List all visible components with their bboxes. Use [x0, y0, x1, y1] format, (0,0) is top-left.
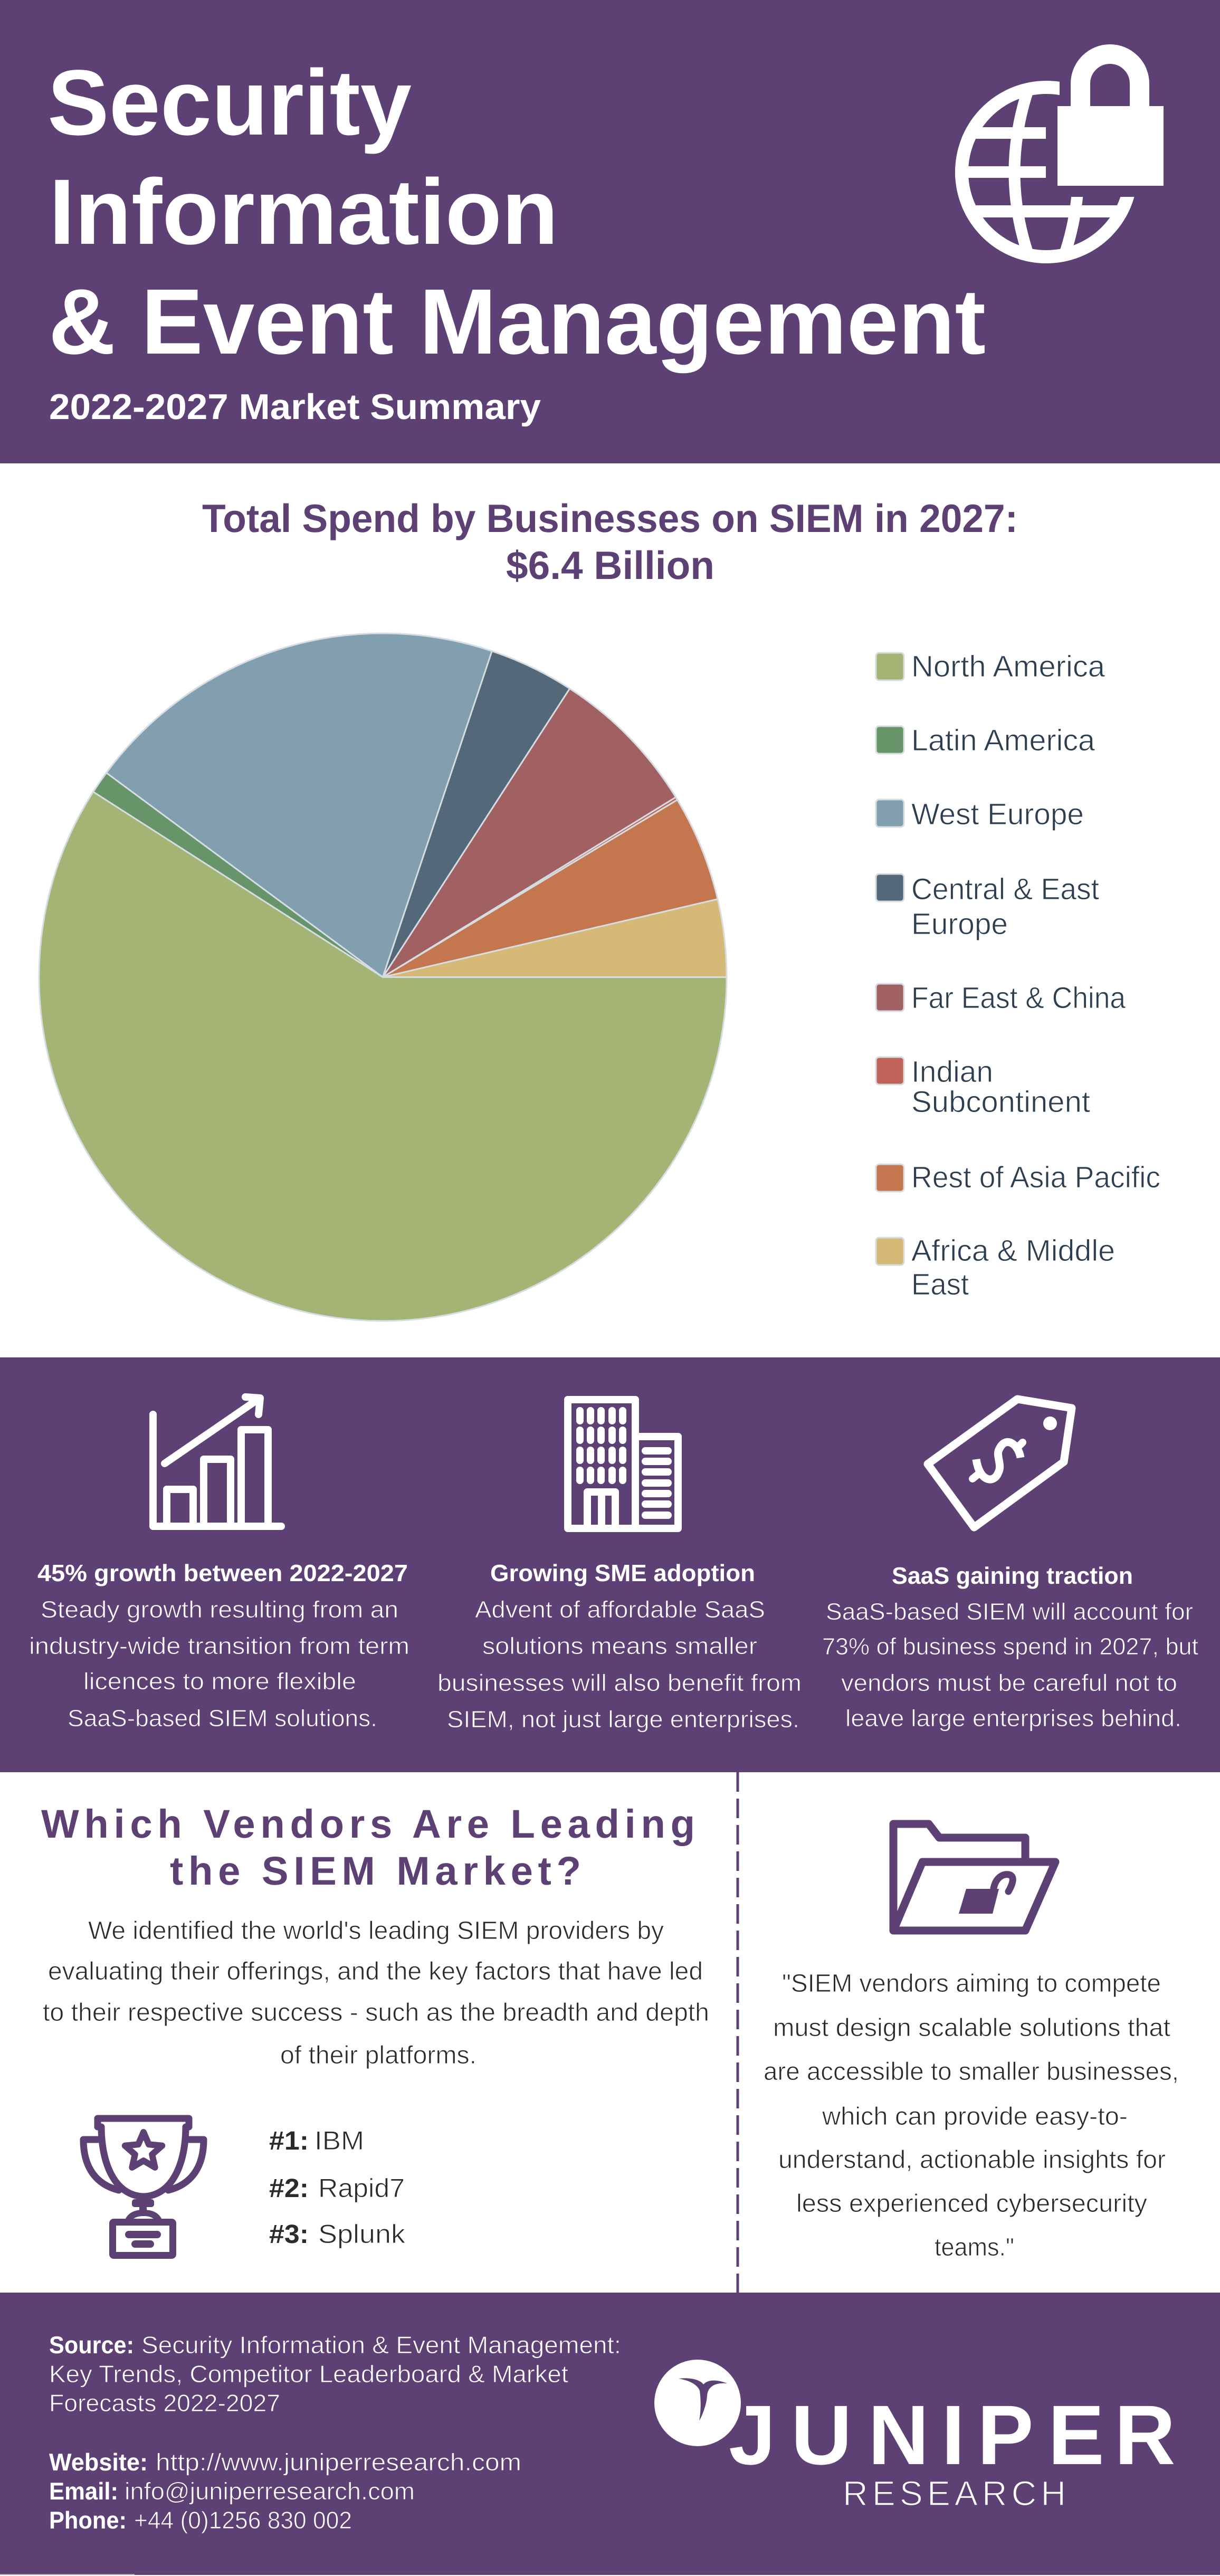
contact details — [49, 2448, 521, 2534]
source text — [49, 2331, 621, 2417]
takeaway: growth: industry-wide transition from term — [29, 1632, 409, 1659]
contact details: http://www.juniperresearch.com — [156, 2448, 521, 2476]
icon: growth bar chart — [153, 1397, 281, 1526]
icon: trophy — [83, 2118, 204, 2256]
title: Security — [47, 51, 412, 155]
takeaway: SaaS traction: SaaS-based SIEM will account for — [826, 1598, 1193, 1625]
takeaway: SME adoption: Advent of affordable SaaS — [475, 1596, 765, 1623]
contact details: Phone: — [49, 2506, 127, 2534]
logo: Juniper Research: JUNIPER — [729, 2388, 1176, 2482]
legend — [876, 650, 1160, 1301]
source text: Key Trends, Competitor Leaderboard & Market — [49, 2360, 568, 2388]
description: We identified the world's leading SIEM providers by — [88, 1917, 664, 1945]
ranking list — [269, 2126, 406, 2249]
legend: Far East & China — [911, 981, 1126, 1015]
heading: the SIEM Market? — [170, 1849, 581, 1894]
panel: footer — [0, 2293, 1220, 2575]
takeaway: SaaS traction: 73% of business spend in 2027, but — [822, 1633, 1198, 1660]
source text: Security Information & Event Management: — [141, 2331, 621, 2359]
source text: Source: — [49, 2331, 134, 2359]
ranking list: Splunk — [318, 2219, 406, 2249]
takeaway: SME adoption: solutions means smaller — [482, 1632, 757, 1659]
ranking list: Rapid7 — [318, 2173, 405, 2203]
chart title: Total Spend by Businesses on SIEM in 2027: — [202, 496, 1018, 540]
quote text: "SIEM vendors aiming to compete — [782, 1970, 1161, 1998]
heading: Which Vendors Are Leading — [41, 1802, 695, 1847]
title — [47, 51, 986, 374]
description — [43, 1917, 709, 2069]
description: to their respective success - such as the breadth and depth — [43, 1999, 709, 2027]
panel: header — [0, 0, 1220, 463]
contact details: +44 (0)1256 830 002 — [134, 2506, 352, 2534]
panel: key takeaways — [0, 1357, 1220, 1772]
takeaway: growth: licences to more flexible — [83, 1668, 356, 1695]
title: Information — [49, 160, 558, 264]
icon: office buildings — [568, 1400, 678, 1528]
takeaway: growth: Steady growth resulting from an — [41, 1596, 398, 1623]
panel: analyst quote — [764, 1824, 1179, 2261]
ranking list: #3: — [269, 2219, 309, 2249]
ranking list: IBM — [314, 2126, 364, 2155]
logo: Juniper Research — [654, 2360, 1176, 2513]
takeaway: SaaS traction: leave large enterprises behind. — [845, 1705, 1181, 1732]
quote text: teams." — [935, 2233, 1014, 2261]
icon: dollar price tag — [928, 1399, 1072, 1527]
takeaway: SaaS traction: SaaS gaining traction — [892, 1562, 1133, 1589]
logo: Juniper Research: RESEARCH — [843, 2474, 1066, 2513]
subtitle: 2022-2027 Market Summary — [49, 387, 541, 427]
quote text: understand, actionable insights for — [778, 2146, 1166, 2174]
title: & Event Management — [49, 270, 986, 374]
contact details: Website: — [49, 2448, 148, 2476]
legend: North America — [911, 650, 1105, 683]
ranking list: #2: — [269, 2173, 309, 2203]
panel: leading vendors — [41, 1802, 709, 2256]
description: evaluating their offerings, and the key factors that have led — [48, 1957, 703, 1985]
takeaway: growth: 45% growth between 2022-2027 — [37, 1560, 408, 1586]
quote text: less experienced cybersecurity — [796, 2190, 1147, 2218]
ranking list: #1: — [269, 2126, 309, 2155]
takeaway: SME adoption: Growing SME adoption — [490, 1560, 755, 1586]
legend: Indian — [911, 1055, 993, 1089]
chart title: $6.4 Billion — [506, 543, 714, 587]
legend: Latin America — [911, 724, 1095, 757]
legend: West Europe — [911, 797, 1084, 831]
legend: Subcontinent — [911, 1085, 1090, 1119]
quote text — [764, 1970, 1179, 2261]
legend: Central & East — [911, 872, 1099, 906]
legend: Rest of Asia Pacific — [911, 1161, 1160, 1194]
source text: Forecasts 2022-2027 — [49, 2389, 280, 2417]
takeaway: growth — [29, 1560, 409, 1732]
legend: Europe — [911, 907, 1008, 941]
icon: folder with open padlock — [893, 1824, 1055, 1931]
description: of their platforms. — [280, 2041, 476, 2069]
takeaway: growth: SaaS-based SIEM solutions. — [68, 1705, 377, 1732]
quote text: which can provide easy-to- — [822, 2103, 1128, 2131]
takeaway: SaaS traction — [822, 1562, 1198, 1732]
contact details: Email: — [49, 2477, 118, 2505]
takeaway: SME adoption — [437, 1560, 802, 1733]
takeaway: SME adoption: SIEM, not just large enterprises. — [447, 1706, 799, 1733]
contact details: info@juniperresearch.com — [125, 2477, 415, 2505]
icon: globe with padlock — [955, 54, 1164, 257]
takeaway: SaaS traction: vendors must be careful not to — [841, 1669, 1177, 1696]
takeaway: SME adoption: businesses will also benefit from — [437, 1669, 802, 1696]
chart title — [202, 496, 1018, 587]
pie chart — [39, 633, 727, 1321]
heading — [41, 1802, 695, 1894]
quote text: must design scalable solutions that — [773, 2014, 1170, 2042]
quote text: are accessible to smaller businesses, — [764, 2058, 1179, 2086]
legend: Africa & Middle — [911, 1234, 1115, 1268]
legend: East — [911, 1268, 969, 1301]
panel: total spend pie chart — [39, 496, 1160, 1321]
